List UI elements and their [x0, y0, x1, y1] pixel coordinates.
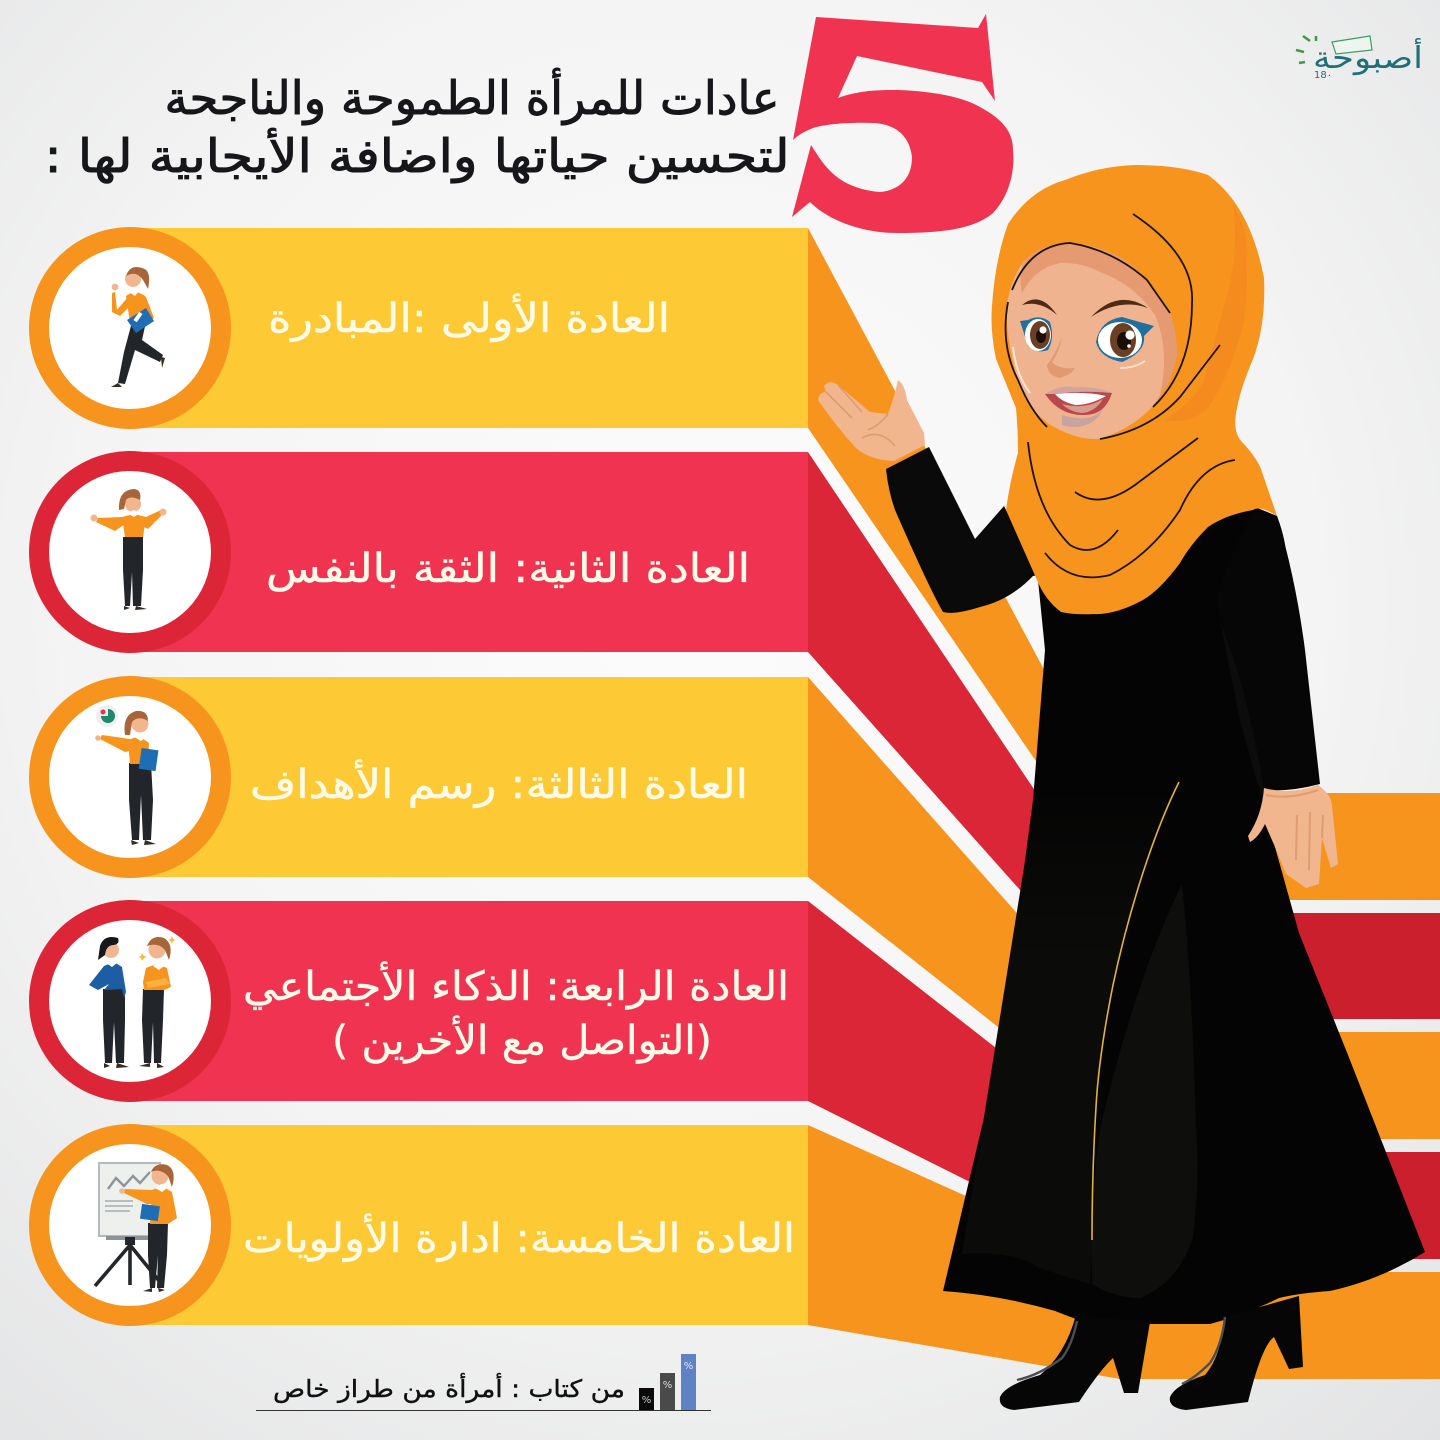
- panel: habit 1: [29, 227, 808, 429]
- forehead shade: [1020, 244, 1177, 395]
- dress gold seam: [1092, 782, 1179, 1240]
- panel: habit 4: [29, 900, 808, 1102]
- dress left tone: [962, 780, 1179, 1284]
- title: لتحسين حياتها واضافة الأيجابية لها :: [44, 127, 790, 184]
- big number 5: [792, 14, 1013, 233]
- right eye: [1096, 317, 1154, 362]
- icon: two women talking: [89, 936, 176, 1068]
- source text: من كتاب : أمرأة من طراز خاص: [273, 1373, 625, 1403]
- raised open hand: [818, 380, 925, 461]
- circle badge 2: [29, 451, 231, 653]
- footer source: [256, 1354, 711, 1411]
- icon: percent bars: %: [684, 1361, 693, 1372]
- mouth: [1045, 387, 1112, 427]
- resting hand: [1248, 785, 1338, 888]
- hijab: [992, 165, 1277, 614]
- circle badge 4: [29, 900, 231, 1102]
- footer underline: [256, 1410, 711, 1411]
- title: [44, 68, 790, 184]
- icon: percent bars: [639, 1354, 696, 1410]
- face: [1006, 244, 1176, 439]
- habit 1 text: العادة الأولى :المبادرة: [268, 293, 670, 342]
- title: عادات للمرأة الطموحة والناجحة: [164, 68, 780, 126]
- left arm in black sleeve: [886, 447, 1040, 613]
- left eye: [1020, 317, 1052, 351]
- icon: woman presenting a pie chart: [95, 705, 158, 845]
- icon: percent bars: %: [642, 1395, 651, 1406]
- circle badge 5: [29, 1124, 231, 1326]
- dress light panel: [1092, 884, 1197, 1298]
- woman illustration: [818, 165, 1425, 1410]
- right sleeve: [1216, 512, 1320, 790]
- left eyebrow: [1022, 299, 1057, 315]
- nose: [1047, 337, 1075, 378]
- habit 5 text: العادة الخامسة: ادارة الأولويات: [243, 1213, 795, 1262]
- habit 3 text: العادة الثالثة: رسم الأهداف: [250, 759, 748, 808]
- logo: [1296, 36, 1423, 81]
- panel: habit 3: [29, 676, 808, 878]
- hijab shade: [1165, 204, 1247, 421]
- circle badge 3: [29, 676, 231, 878]
- logo: أصبوحة: [1313, 37, 1423, 76]
- logo building: [1332, 36, 1372, 54]
- angled ribbons running behind the woman: [808, 228, 1440, 1379]
- icon: woman with open arms: [90, 489, 166, 610]
- hijab fold lines: [1006, 214, 1235, 577]
- panel: habit 5: [29, 1124, 808, 1326]
- under eye highlight: [1120, 361, 1145, 368]
- icon: percent bars: %: [663, 1380, 672, 1391]
- right eyebrow: [1091, 300, 1148, 317]
- panel: habit 2: [29, 451, 808, 653]
- habit 4 subtext: (التواصل مع الأخرين ): [332, 1015, 712, 1064]
- icon: running woman with book: [111, 267, 165, 387]
- icon: woman at a presentation board: [95, 1163, 177, 1292]
- left boot: [1000, 1315, 1150, 1410]
- logo year: 18٠: [1314, 70, 1332, 81]
- habit 2 text: العادة الثانية: الثقة بالنفس: [266, 546, 750, 592]
- logo leaves: [1296, 36, 1316, 63]
- habit 4 text: العادة الرابعة: الذكاء الأجتماعي: [243, 961, 789, 1010]
- right boot: [1170, 1296, 1303, 1410]
- circle badge 1: [29, 227, 231, 429]
- dress body: [943, 505, 1425, 1324]
- cheek highlight: [1013, 347, 1030, 393]
